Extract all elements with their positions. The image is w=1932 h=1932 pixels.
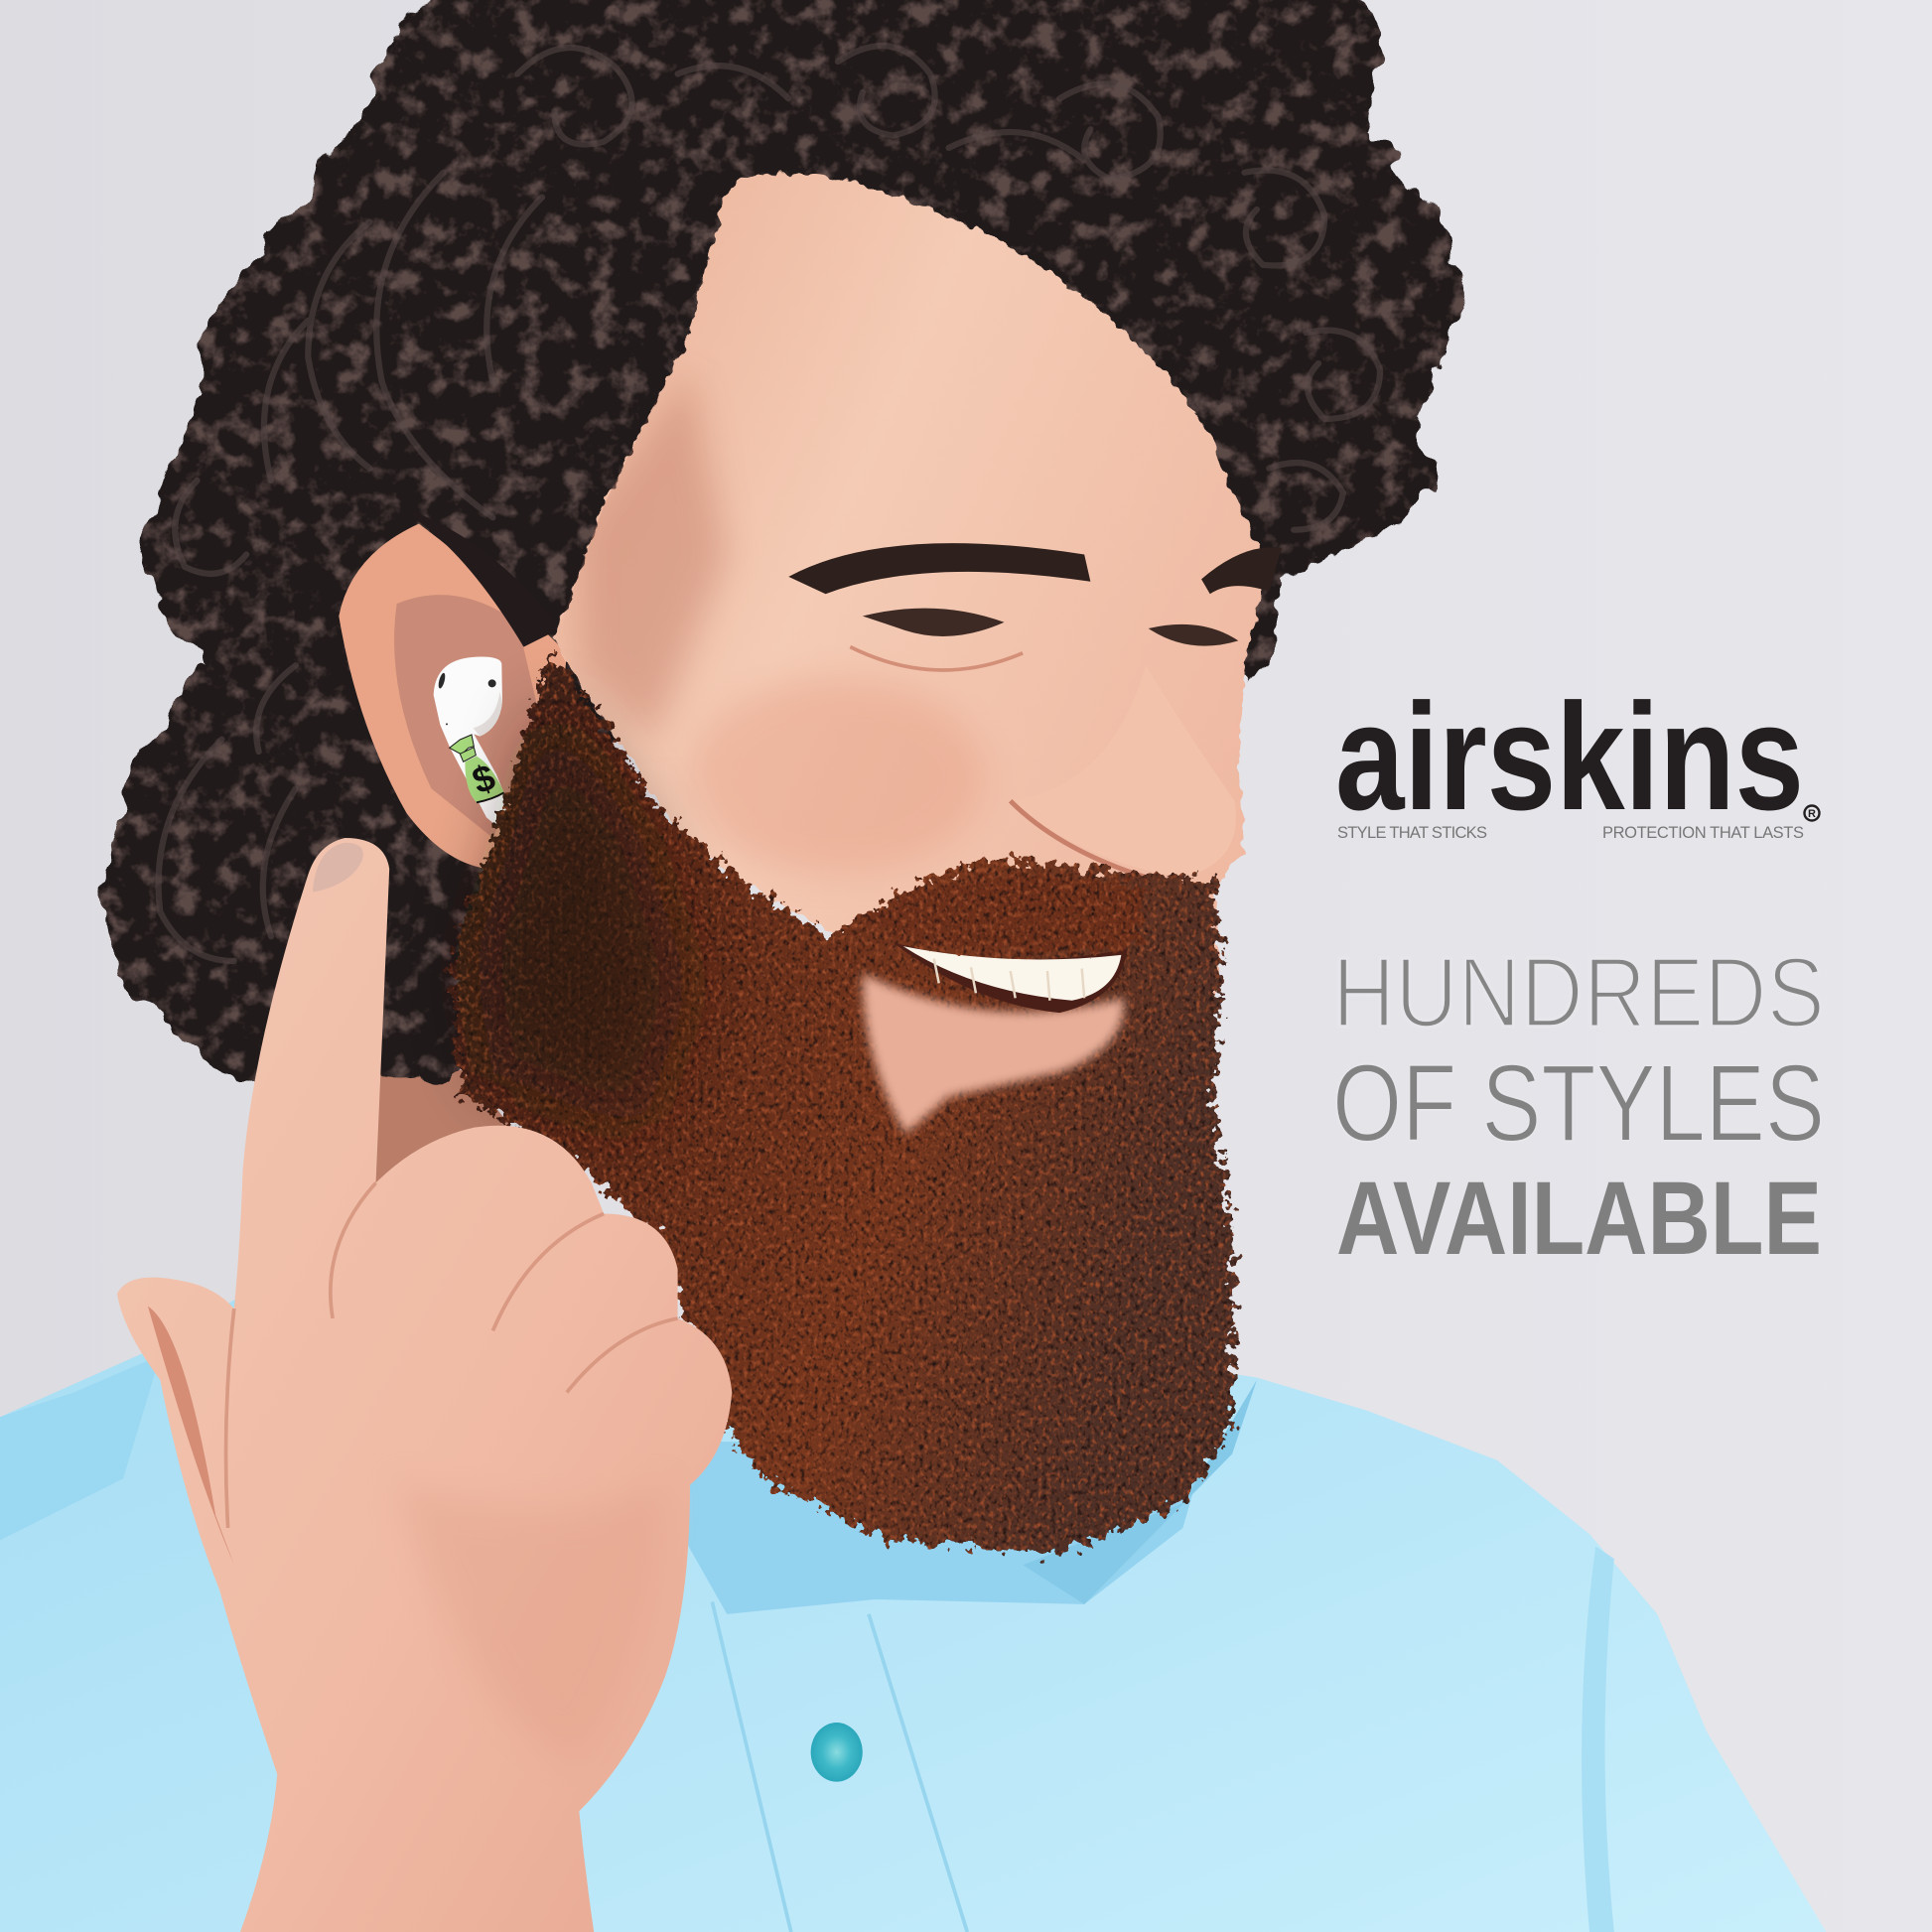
beard dark shading <box>475 702 690 1134</box>
hair curls <box>159 46 1380 961</box>
shirt <box>0 1189 1826 1932</box>
registered mark: R <box>1808 808 1816 820</box>
eyebrow: near <box>788 543 1090 594</box>
cheek flush <box>690 678 986 875</box>
fingernail <box>313 843 363 893</box>
shirt button <box>811 1723 863 1782</box>
headline line 3: AVAILABLE <box>1336 1161 1822 1277</box>
headline line 1: HUNDREDS <box>1332 937 1825 1048</box>
mouth <box>894 942 1128 1013</box>
lock of hair over ear <box>413 511 561 647</box>
logo: airskins <box>1335 672 1819 842</box>
earbud with money bag skin <box>434 657 519 836</box>
hand with pointing finger <box>117 838 732 1932</box>
nose <box>1011 665 1236 878</box>
finger creases <box>226 1182 678 1528</box>
money bag icon: $ <box>467 756 500 802</box>
eyebrow: far <box>1201 547 1282 594</box>
money bag icon <box>450 735 504 802</box>
teeth <box>903 946 1121 1001</box>
face <box>552 170 1281 995</box>
headline <box>1332 937 1825 1277</box>
eye: near <box>863 609 1004 636</box>
chin skin <box>863 973 1124 1134</box>
registered mark <box>1805 806 1819 820</box>
tagline left: STYLE THAT STICKS <box>1337 824 1487 842</box>
hair <box>98 0 1468 1090</box>
logo wordmark: airskins <box>1335 672 1804 842</box>
tagline right: PROTECTION THAT LASTS <box>1602 824 1804 842</box>
ear <box>339 511 567 869</box>
eye: far <box>1149 624 1238 646</box>
headline line 2: OF STYLES <box>1332 1042 1825 1165</box>
beard <box>450 653 1235 1555</box>
sideburn shadow <box>579 369 727 740</box>
moustache edge <box>863 874 1146 951</box>
neck <box>369 1047 554 1220</box>
